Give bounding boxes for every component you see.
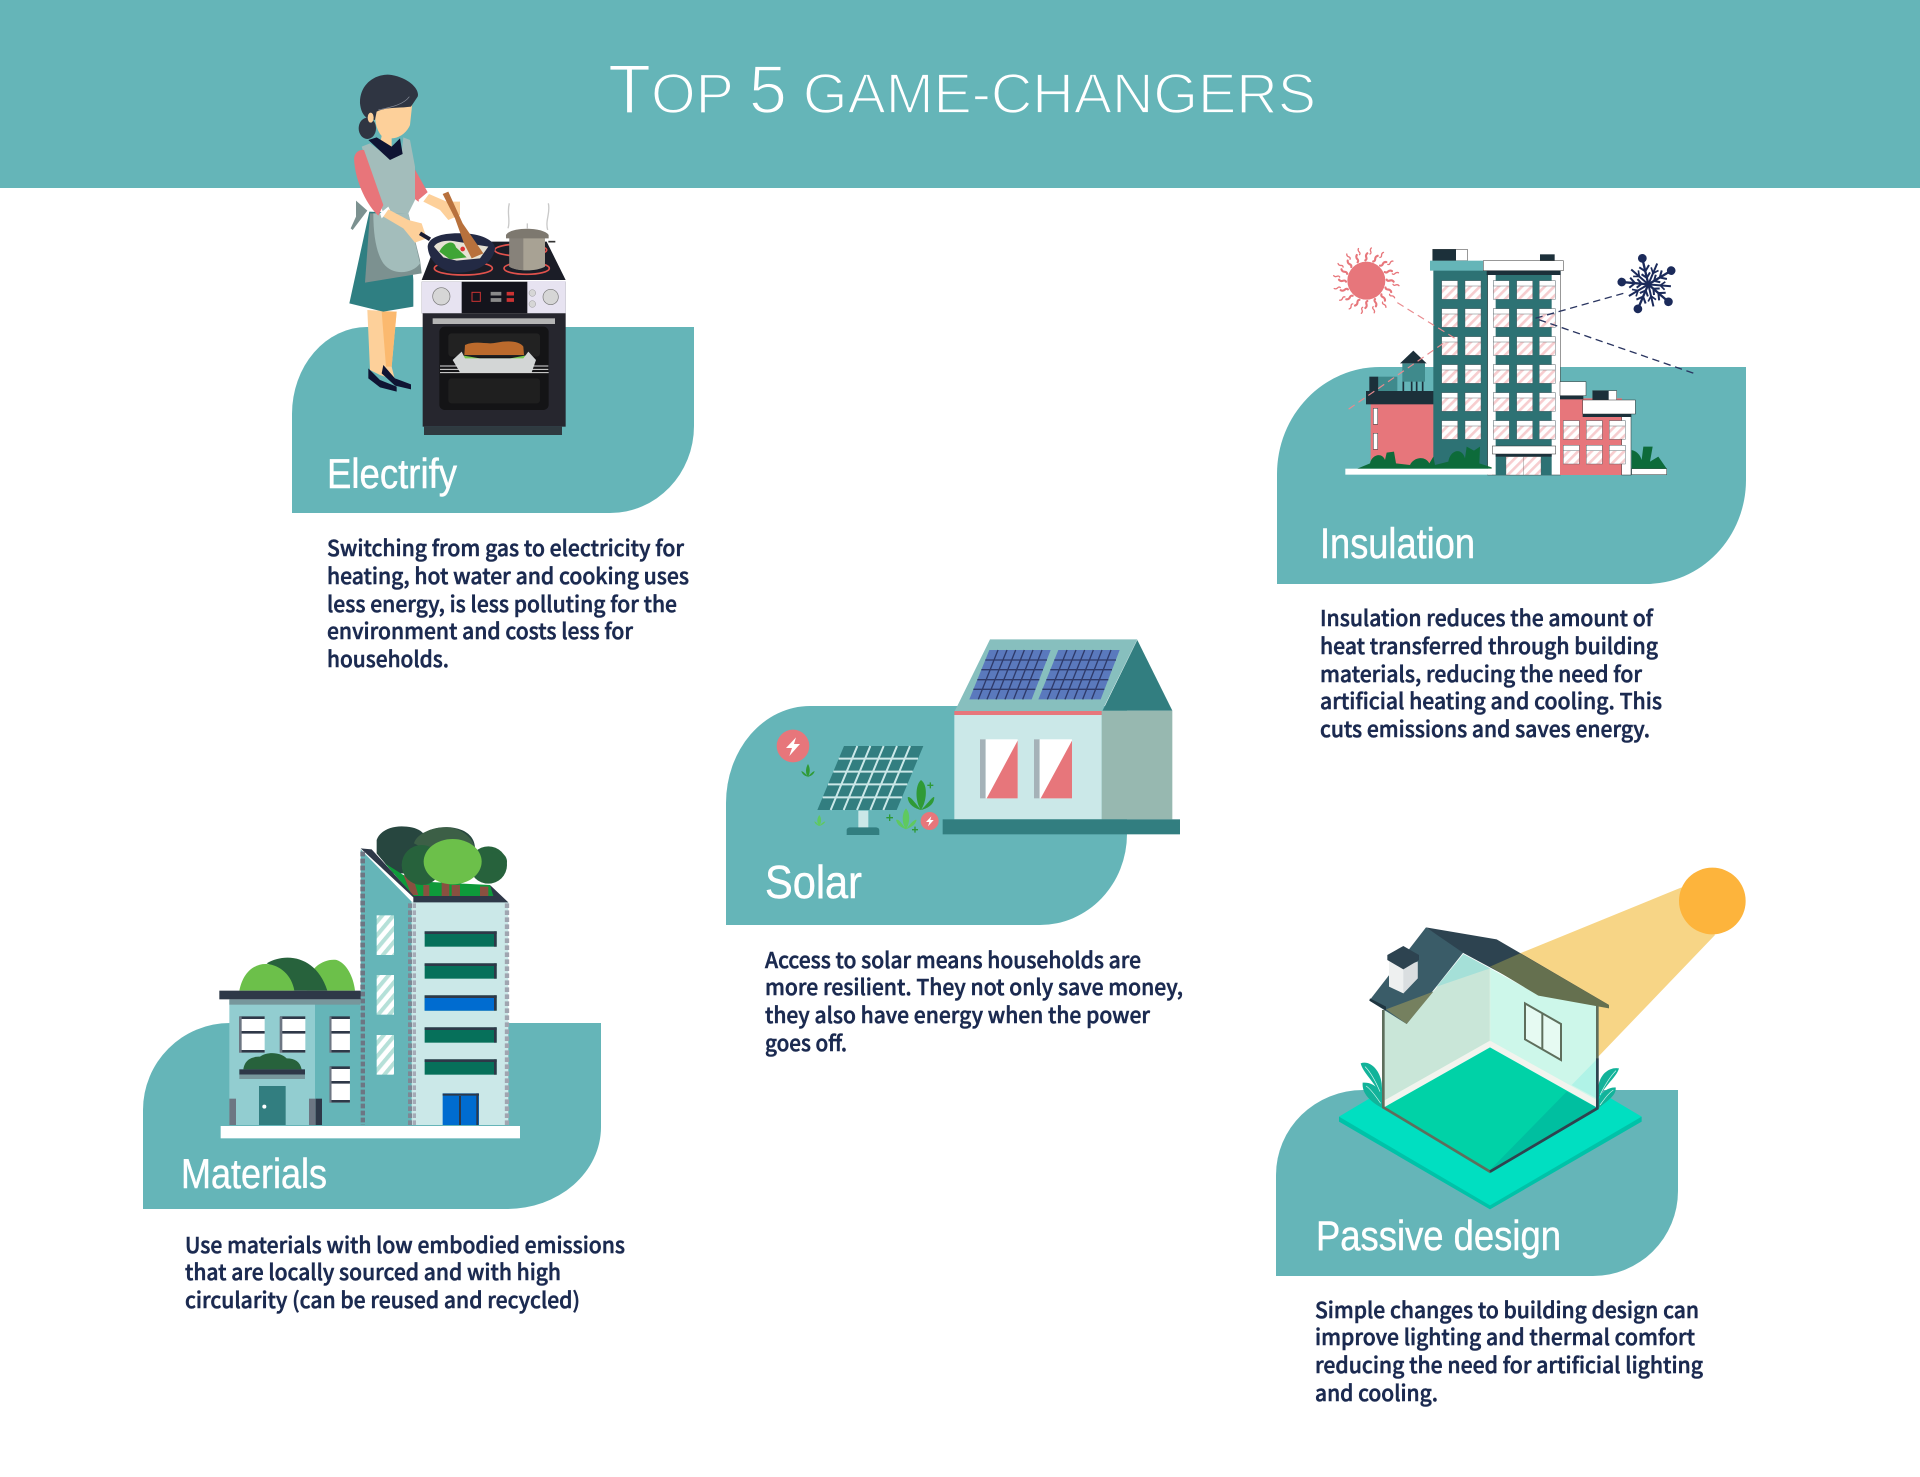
stove top — [422, 242, 566, 280]
hair — [360, 75, 418, 120]
window — [1525, 1003, 1561, 1060]
text: Electrify description: less energy, is less polluting for the — [327, 587, 677, 619]
plants — [1357, 447, 1492, 469]
text: Passive design description: and cooling. — [1315, 1376, 1438, 1408]
house frame — [1383, 1005, 1597, 1172]
icon: power badge small — [921, 812, 939, 830]
plants — [908, 780, 934, 810]
illustration: house with rooftop solar and solar panel — [777, 639, 1180, 835]
text: Passive design description: reducing the need for artificial lighting — [1315, 1348, 1703, 1380]
text: Insulation description: Insulation reduces the amount of — [1320, 601, 1654, 633]
platform — [1339, 1117, 1642, 1209]
heading: Solar: Solar — [765, 856, 862, 908]
text: Solar description: more resilient. They not only save money, — [765, 970, 1183, 1002]
text: Electrify description: heating, hot water and cooking uses — [327, 559, 689, 591]
illustration: woman cooking at electric stove — [349, 75, 566, 435]
oven body — [423, 313, 566, 427]
text: Solar description: they also have energy when the power — [765, 998, 1151, 1030]
Electrify teal shape — [292, 327, 694, 513]
panel: Solar — [726, 639, 1183, 1058]
heading: Passive design: Passive design — [1316, 1212, 1561, 1259]
small building — [229, 1000, 315, 1125]
heading: Insulation: Insulation — [1320, 520, 1475, 568]
pan — [420, 233, 430, 239]
panel: Insulation — [1277, 248, 1746, 744]
wooden spoon — [443, 192, 483, 258]
walls — [1383, 954, 1490, 1102]
illustration: passive solar house on platform — [1339, 868, 1746, 1209]
text: Passive design description: improve lighting and thermal comfort — [1315, 1320, 1695, 1352]
text: Solar description: goes off. — [765, 1026, 847, 1058]
house side wall — [1102, 711, 1172, 819]
ground — [1345, 469, 1492, 475]
text: Solar description: Access to solar means households are — [765, 943, 1141, 975]
icon: snowflake — [1617, 253, 1677, 315]
tall building faces — [361, 849, 412, 1125]
text: Insulation description: artificial heating and cooling. This — [1320, 684, 1662, 716]
panel: Passive design — [1276, 868, 1746, 1408]
floor — [1384, 1047, 1597, 1172]
text: Passive design description: Simple changes to building design can — [1315, 1293, 1699, 1325]
text: Materials description: Use materials with low embodied emissions — [185, 1228, 625, 1260]
left pink building — [1371, 404, 1434, 467]
illustration: insulated apartment buildings with sun and snowflake — [1334, 248, 1697, 475]
face and neck — [374, 100, 413, 147]
pot — [509, 237, 545, 270]
right pink building — [1560, 398, 1622, 475]
sun — [1679, 868, 1746, 934]
roof — [1369, 927, 1464, 1024]
sunbeam — [1520, 887, 1715, 1057]
illustration: low-emission buildings with green roofs — [219, 826, 520, 1138]
text: Insulation description: heat transferred through building — [1320, 629, 1658, 661]
house windows — [980, 739, 986, 798]
icon: power badge large — [777, 730, 809, 762]
tower windows — [1442, 281, 1555, 439]
dashed lines — [1348, 303, 1455, 409]
small building roof bushes — [307, 960, 355, 991]
heading: Materials: Materials — [181, 1150, 327, 1197]
text: Electrify description: households. — [327, 642, 449, 674]
panel: Materials — [143, 826, 625, 1315]
hair bun — [359, 118, 376, 139]
leaves — [1361, 1063, 1383, 1108]
icon: sun — [1334, 248, 1399, 313]
Passive design teal shape — [1276, 1090, 1678, 1276]
text: Insulation description: materials, reducing the need for — [1320, 657, 1643, 689]
text: Materials description: that are locally sourced and with high — [185, 1255, 561, 1287]
control panel — [422, 282, 566, 313]
tower — [1433, 270, 1488, 468]
chimney — [1389, 960, 1418, 993]
Solar teal shape — [726, 706, 1127, 925]
apron ties — [351, 201, 367, 230]
text: Insulation description: cuts emissions and saves energy. — [1320, 712, 1650, 744]
solar panel — [817, 746, 923, 810]
header band — [0, 0, 1920, 188]
Insulation teal shape — [1277, 367, 1746, 584]
Materials teal shape — [143, 1023, 601, 1209]
text: Electrify description: Switching from gas to electricity for — [327, 531, 685, 563]
text: Electrify description: environment and costs less for — [327, 614, 634, 646]
rooftop trees — [377, 826, 475, 873]
heading: Electrify: Electrify — [327, 450, 457, 497]
text: Materials description: circularity (can be reused and recycled) — [185, 1283, 580, 1315]
panel: Electrify — [292, 75, 694, 674]
roast — [464, 341, 524, 355]
title: TOP 5 GAME-CHANGERS — [608, 50, 1316, 128]
